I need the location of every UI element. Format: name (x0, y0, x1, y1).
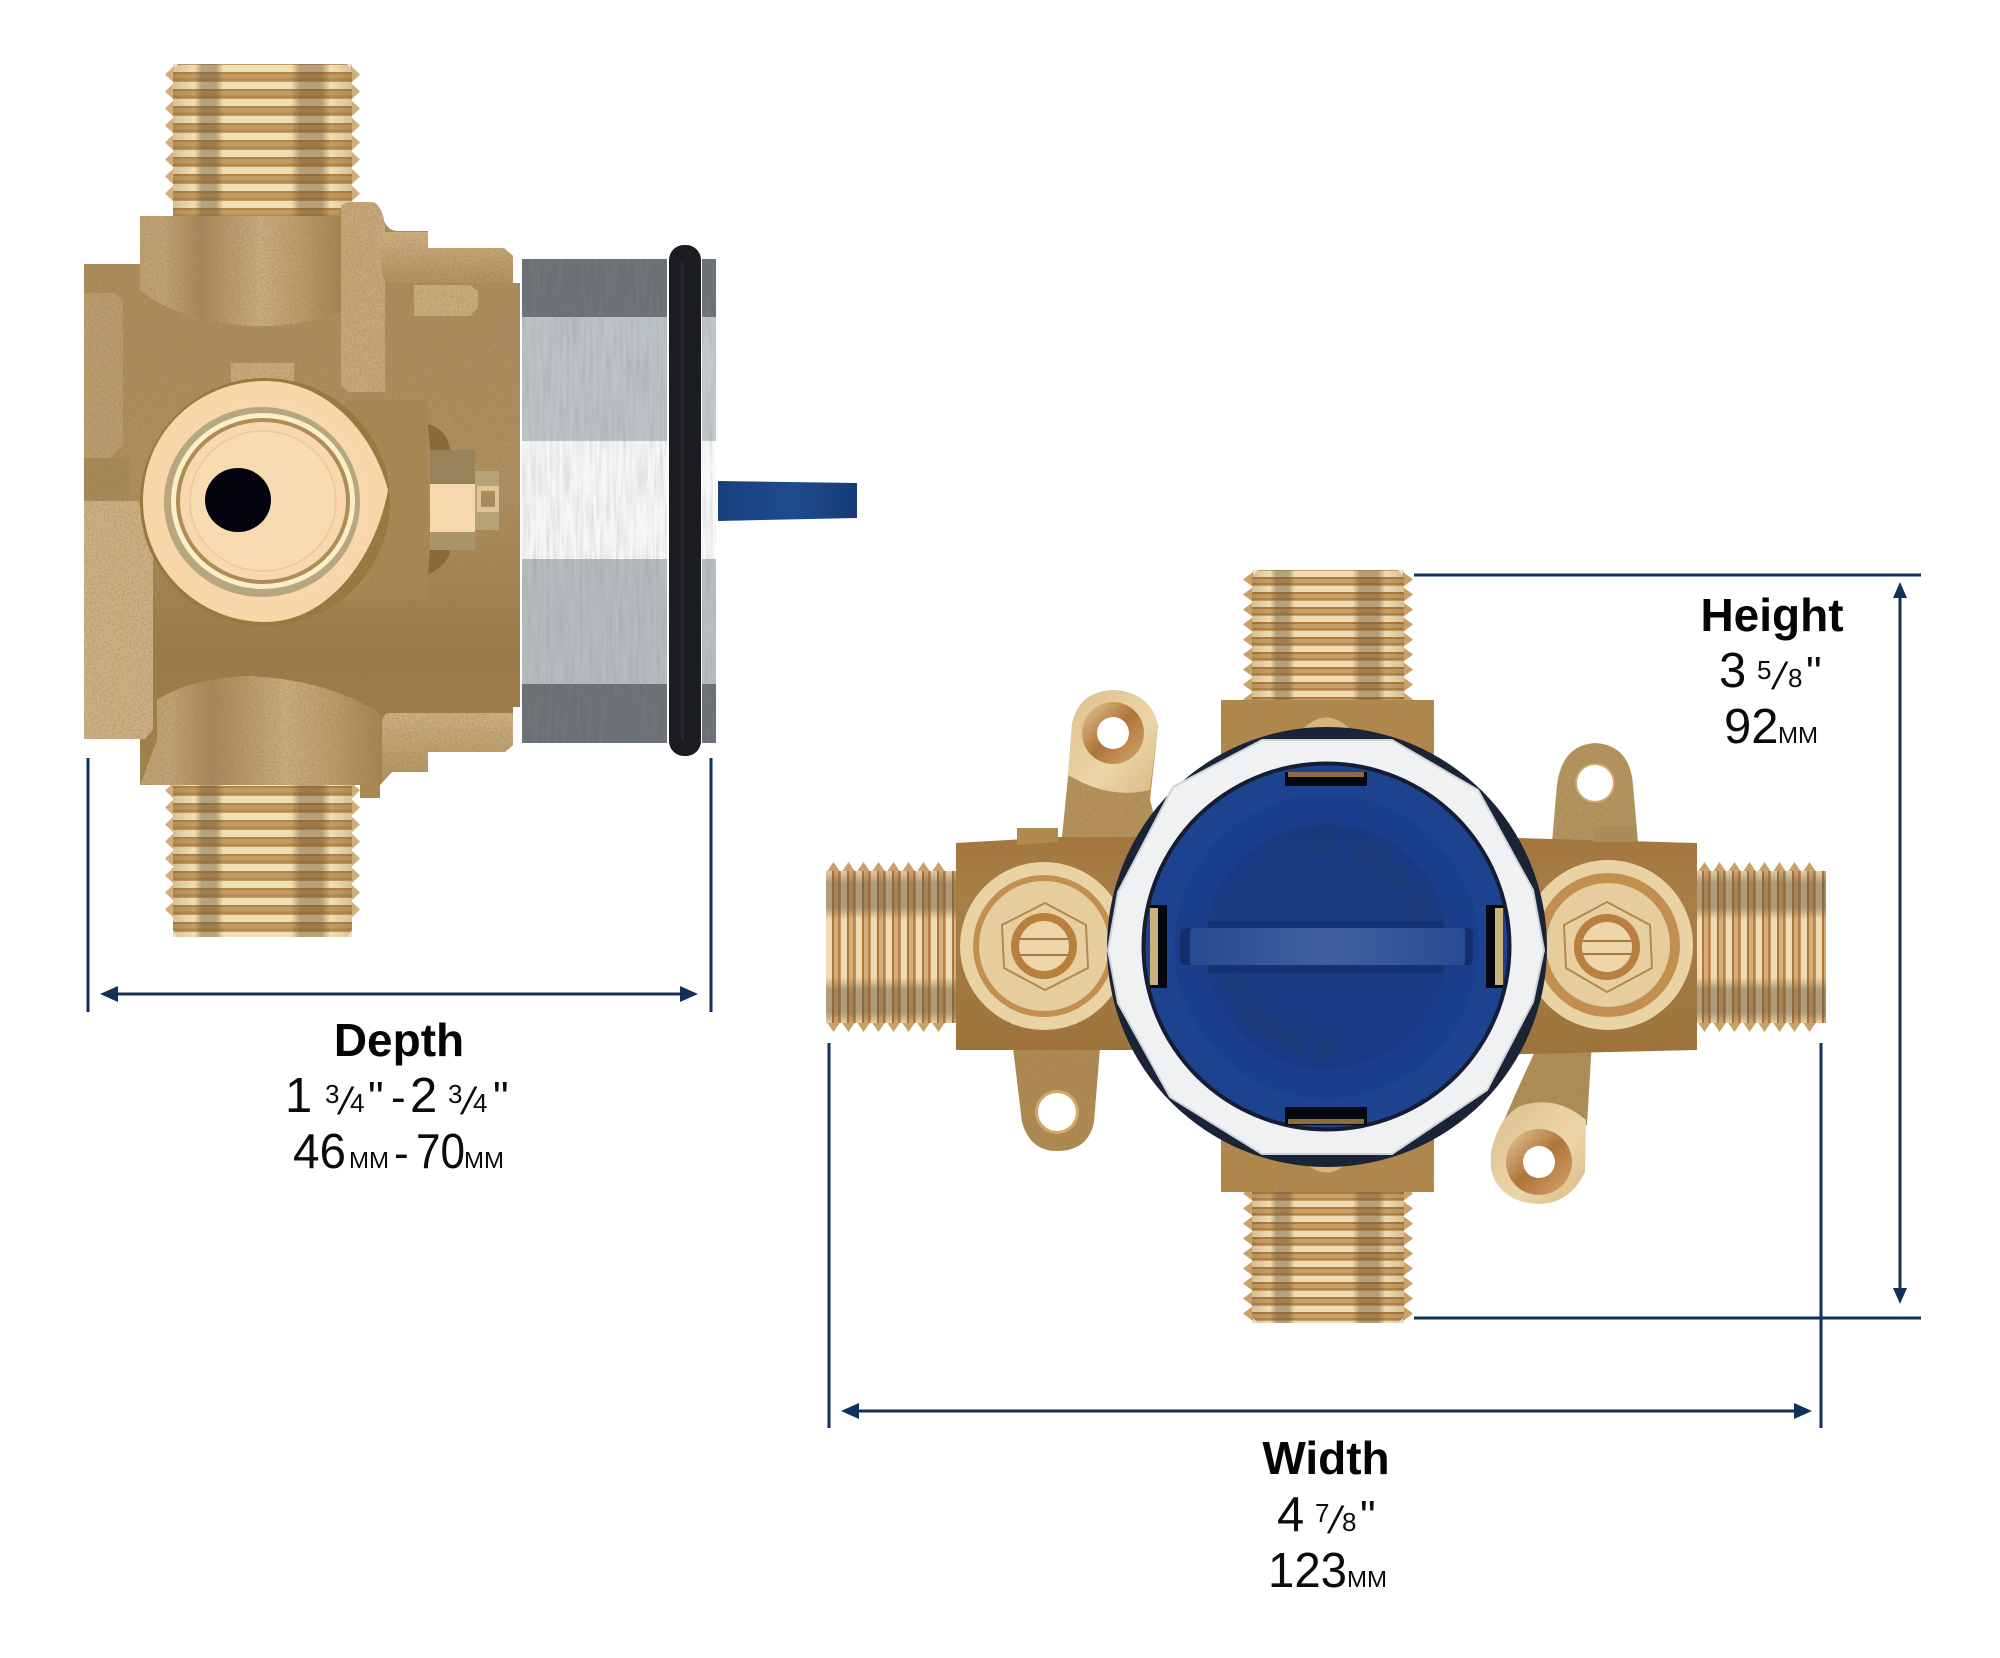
width arrow (841, 1403, 1812, 1419)
width label: 4 (1277, 1488, 1304, 1542)
brass cast body side (84, 202, 520, 785)
depth label (285, 1014, 509, 1179)
dark gasket ring (1107, 727, 1547, 1167)
right port (1523, 860, 1693, 1030)
screw fitting (428, 424, 499, 574)
depth label: MM (464, 1147, 504, 1173)
height label: MM (1778, 722, 1818, 748)
left port (960, 862, 1128, 1030)
left threaded pipe (826, 862, 958, 1032)
chrome hex ring (1108, 740, 1544, 1154)
height label (1700, 589, 1844, 754)
width extension lines (829, 1043, 1821, 1428)
ear faces and holes (1035, 690, 1615, 1204)
height label: 8 (1788, 663, 1802, 693)
side view valve (84, 64, 857, 937)
hex nut (522, 259, 667, 743)
depth label: " (493, 1073, 509, 1122)
width label: " (1360, 1492, 1376, 1541)
width label: 8 (1342, 1507, 1356, 1537)
depth label: 70 (416, 1125, 465, 1179)
handle bar (1180, 921, 1473, 973)
depth dimension (88, 758, 711, 1012)
depth label: " (368, 1073, 384, 1122)
blue spindle tab (718, 481, 857, 521)
height label: / (1769, 656, 1790, 698)
thin flange (702, 259, 716, 743)
depth label: 3 (325, 1079, 339, 1109)
mounting ears (1013, 690, 1638, 1151)
top threaded pipe (1243, 570, 1413, 707)
width label (1262, 1432, 1390, 1598)
depth label: MM (349, 1147, 389, 1173)
width label: / (1325, 1500, 1346, 1542)
height label: " (1806, 648, 1822, 697)
height label: Height (1700, 589, 1844, 641)
cap slots (1150, 772, 1503, 1125)
black o-ring (669, 245, 701, 756)
height extension lines (1414, 575, 1921, 1318)
inlet port circle (140, 378, 390, 626)
depth label: / (335, 1081, 356, 1123)
depth label: 4 (473, 1088, 487, 1118)
width label: 123 (1268, 1544, 1347, 1598)
depth label: 4 (350, 1088, 364, 1118)
blue protective cap (1142, 762, 1512, 1132)
width label: 7 (1315, 1498, 1329, 1528)
small cast tabs (1017, 718, 1636, 1172)
height arrow (1893, 582, 1907, 1304)
front view valve (826, 570, 1826, 1323)
width label: Width (1262, 1432, 1390, 1484)
depth label: 1 (285, 1069, 312, 1123)
depth label: - (394, 1129, 409, 1178)
height label: 3 (1719, 644, 1746, 698)
depth label: 46 (293, 1125, 346, 1179)
depth label: 3 (448, 1079, 462, 1109)
bottom threaded pipe (1243, 1186, 1413, 1323)
width label: MM (1347, 1566, 1387, 1592)
height dimension (1414, 575, 1921, 1318)
cross shaped brass body (956, 700, 1697, 1192)
height label: 5 (1757, 655, 1771, 685)
right threaded pipe (1696, 862, 1826, 1032)
cap recess dents (1222, 834, 1430, 1059)
depth label: - (391, 1073, 406, 1122)
bottom threaded pipe (165, 782, 380, 937)
depth label: / (458, 1081, 479, 1123)
depth arrow (100, 986, 698, 1002)
height label: 92 (1724, 700, 1779, 754)
depth label: 2 (410, 1069, 437, 1123)
width dimension (829, 1043, 1821, 1428)
top threaded pipe (165, 64, 360, 216)
depth extension lines (88, 758, 711, 1012)
depth label: Depth (334, 1014, 464, 1066)
